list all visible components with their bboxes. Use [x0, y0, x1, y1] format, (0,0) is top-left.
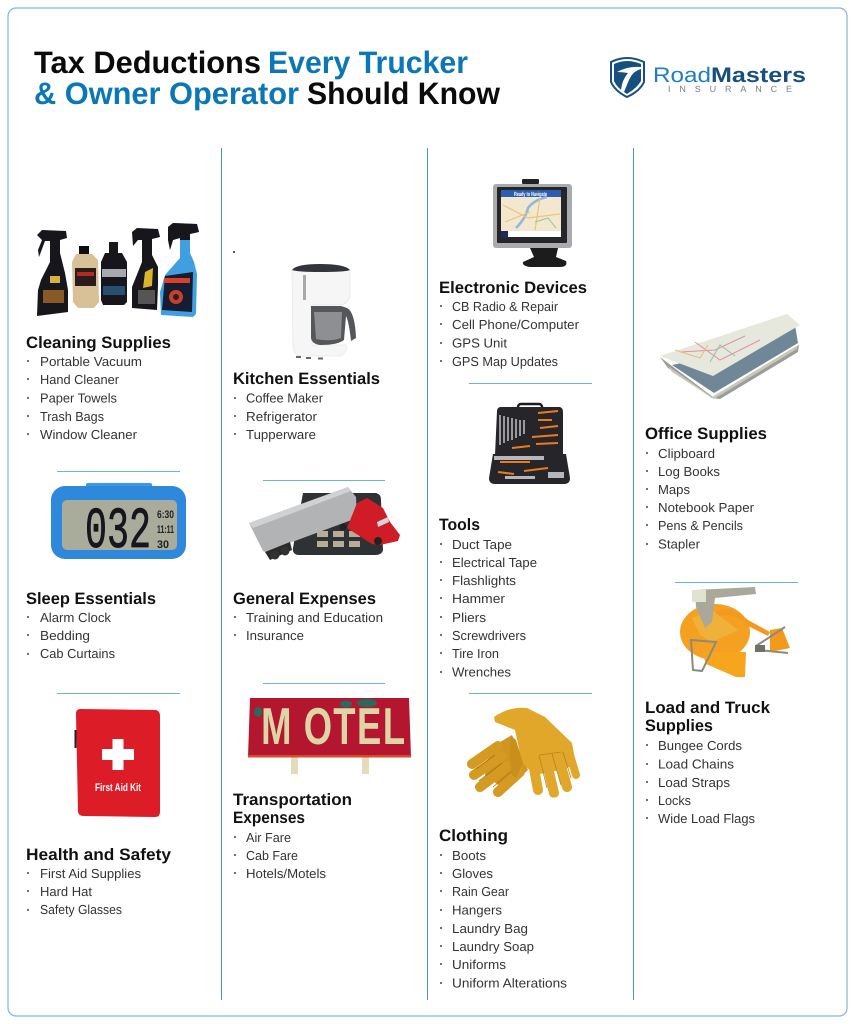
panel: electronic devices: [439, 179, 587, 369]
icon: coffee maker: [292, 264, 356, 360]
list: Tire Iron: [452, 646, 499, 661]
list: [646, 738, 755, 826]
list: Hard Hat: [40, 884, 92, 899]
list: Pliers: [452, 610, 487, 625]
list: [27, 354, 142, 442]
list: Hotels/Motels: [246, 866, 327, 881]
list: [234, 830, 327, 881]
list: Rain Gear: [452, 884, 510, 899]
icon: alarm clock: 11:11: [157, 524, 174, 536]
list: Air Fare: [246, 830, 291, 845]
heading: Supplies: [645, 717, 713, 735]
logo: RoadMasters Insurance: INSURANCE: [668, 84, 792, 94]
list: [27, 610, 115, 661]
heading: Kitchen Essentials: [233, 370, 380, 388]
title: [34, 45, 501, 111]
heading: Transportation: [233, 791, 352, 809]
list: Uniforms: [452, 957, 507, 972]
list: Cell Phone/Computer: [452, 317, 580, 332]
list: First Aid Supplies: [40, 866, 141, 881]
list: Load Chains: [658, 756, 735, 772]
list: Boots: [452, 848, 487, 863]
heading: Expenses: [233, 809, 305, 827]
list: Flashlights: [452, 573, 517, 588]
list: [440, 848, 568, 990]
list: Electrical Tape: [452, 555, 537, 570]
heading: Clothing: [439, 827, 508, 845]
list: Maps: [658, 482, 690, 497]
icon: motel sign: MOTEL: [261, 698, 405, 756]
stray dot: [233, 251, 235, 253]
list: Refrigerator: [246, 409, 318, 424]
heading: Electronic Devices: [439, 279, 587, 297]
logo: RoadMasters Insurance: Masters: [711, 64, 806, 87]
icon: truck on calculator: [249, 487, 400, 560]
title: Tax Deductions: [34, 45, 261, 80]
list: [234, 390, 324, 442]
list: Hand Cleaner: [40, 372, 120, 387]
list: Safety Glasses: [40, 902, 122, 917]
icon: GPS unit: Ready to Navigate: [514, 191, 547, 198]
panel: cleaning supplies: [26, 223, 199, 442]
icon: first aid kit: First Aid Kit: [95, 782, 141, 794]
icon: alarm clock: 032: [85, 500, 151, 565]
list: Notebook Paper: [658, 500, 755, 515]
heading: Load and Truck: [645, 699, 771, 717]
list: Trash Bags: [40, 409, 104, 424]
heading: Tools: [439, 516, 480, 534]
icon: alarm clock: [51, 483, 186, 565]
list: Wide Load Flags: [658, 811, 755, 826]
heading: Sleep Essentials: [26, 590, 156, 608]
icon: work gloves: [472, 708, 576, 793]
list: Laundry Soap: [452, 939, 534, 954]
panel: office supplies: [645, 314, 800, 552]
list: Gloves: [452, 866, 493, 881]
list: Cab Fare: [246, 848, 298, 863]
icon: alarm clock: 6:30: [157, 509, 174, 521]
panel: general expenses: [233, 487, 400, 643]
list: GPS Map Updates: [452, 354, 558, 369]
panel: tools: [439, 404, 570, 680]
list: Pens & Pencils: [658, 518, 743, 533]
list: Paper Towels: [40, 390, 117, 406]
list: Log Books: [658, 464, 720, 479]
icon: shield: [611, 58, 644, 97]
list: Hangers: [452, 902, 503, 918]
list: Locks: [658, 793, 691, 808]
panel: health and safety: [26, 709, 172, 917]
icon: folded road map: [660, 314, 800, 399]
list: Cab Curtains: [40, 646, 115, 661]
icon: cleaning bottles: [37, 223, 199, 317]
title: & Owner Operator: [34, 76, 299, 111]
list: CB Radio & Repair: [452, 299, 559, 314]
list: [27, 866, 141, 917]
icon: alarm clock: 30: [157, 539, 169, 551]
list: Screwdrivers: [452, 628, 526, 643]
list: Training and Education: [246, 610, 383, 625]
icon: motel sign: [248, 698, 411, 774]
panel: load and truck supplies: [645, 587, 790, 826]
heading: [645, 699, 771, 735]
list: Coffee Maker: [246, 390, 324, 406]
panel: sleep essentials: [26, 483, 186, 661]
icon: GPS unit: [493, 179, 572, 267]
heading: General Expenses: [233, 590, 376, 608]
list: Wrenches: [452, 664, 511, 680]
list: Hammer: [452, 591, 506, 606]
list: Load Straps: [658, 775, 731, 790]
list: GPS Unit: [452, 336, 507, 350]
title: Should Know: [307, 76, 501, 111]
panel: transportation expenses: [233, 698, 411, 881]
list: Window Cleaner: [40, 427, 138, 442]
icon: first aid kit: [74, 709, 160, 817]
list: Uniform Alterations: [452, 976, 568, 990]
icon: tool case: [489, 404, 570, 484]
title: Every Trucker: [268, 45, 468, 80]
list: Alarm Clock: [40, 610, 111, 625]
list: [646, 446, 755, 552]
list: Bedding: [40, 628, 90, 643]
panel: clothing: [439, 708, 576, 990]
logo: RoadMasters Insurance: [611, 58, 806, 97]
list: Clipboard: [658, 446, 715, 461]
heading: Cleaning Supplies: [26, 334, 171, 352]
list: [440, 299, 580, 369]
list: Stapler: [658, 536, 701, 552]
logo: RoadMasters Insurance: Road: [653, 64, 711, 87]
list: Portable Vacuum: [40, 354, 142, 369]
heading: Office Supplies: [645, 425, 767, 443]
heading: Health and Safety: [26, 846, 172, 864]
list: Bungee Cords: [658, 738, 742, 753]
list: Tupperware: [246, 427, 316, 442]
list: [234, 610, 383, 643]
heading: [233, 791, 352, 827]
list: Duct Tape: [452, 537, 512, 552]
list: Insurance: [246, 628, 304, 643]
icon: ratchet strap: [680, 587, 790, 677]
list: [440, 537, 537, 680]
panel: kitchen essentials: [233, 264, 380, 442]
list: Laundry Bag: [452, 921, 528, 936]
